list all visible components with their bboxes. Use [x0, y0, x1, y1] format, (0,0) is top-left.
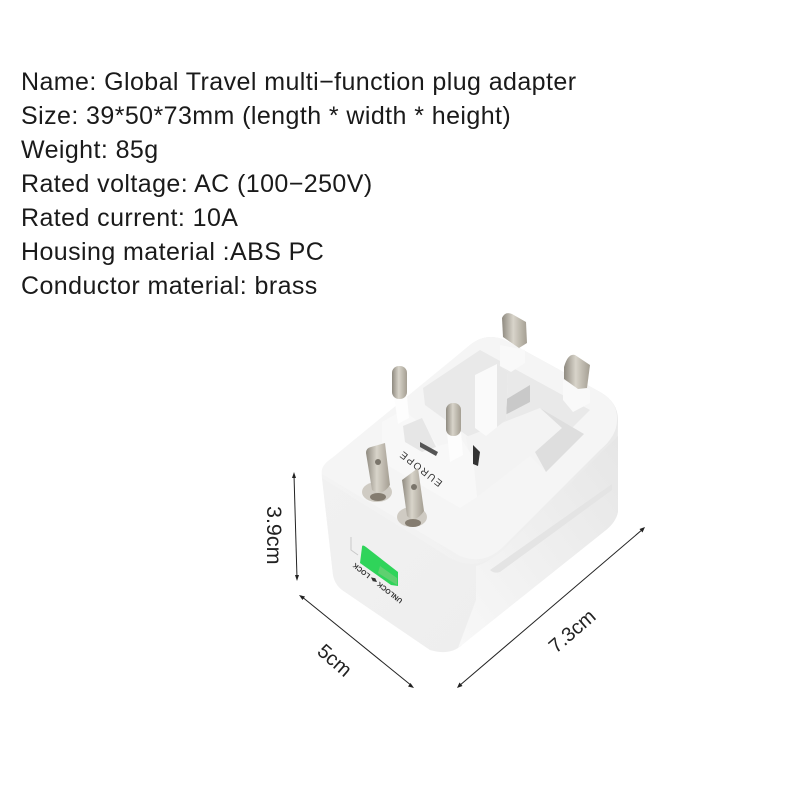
- UK pin rear right: [563, 355, 590, 412]
- spec: size: Size: 39*50*73mm (length * width * height): [21, 102, 511, 130]
- raised socket platform: [466, 408, 584, 497]
- UK pin rear left: [500, 313, 527, 372]
- dimension: length label: 7.3cm: [545, 605, 600, 658]
- spec: rated voltage: Rated voltage: AC (100−250V): [21, 170, 373, 198]
- dimension: width arrow: [299, 595, 414, 688]
- spec: weight: Weight: 85g: [21, 136, 159, 164]
- europe label: EUROPE: [397, 448, 445, 488]
- europe pin block: [382, 410, 477, 508]
- europe pin left: [392, 366, 409, 424]
- dimension: length arrow: [457, 527, 645, 688]
- UK socket recess: [423, 350, 590, 445]
- spec: housing material: Housing material :ABS PC: [21, 238, 324, 266]
- US pin right: [397, 468, 427, 527]
- dimension: height arrow: [292, 472, 299, 581]
- europe block recess: [403, 418, 436, 452]
- front face: [322, 478, 490, 652]
- spec: rated current: Rated current: 10A: [21, 204, 238, 232]
- green slider switch: [360, 546, 398, 586]
- spec: name: Name: Global Travel multi−function plug adapter: [21, 68, 576, 96]
- US pin left: [362, 443, 392, 502]
- specification text block: [21, 68, 576, 300]
- unlock lock label: UNLOCK ◂▸ LOCK: [352, 561, 404, 604]
- right side face: [458, 436, 618, 648]
- dimension: width label: 5cm: [313, 640, 356, 682]
- adapter body: [322, 337, 618, 652]
- recess window: [535, 408, 584, 472]
- UK earth pin: [475, 364, 508, 436]
- side highlight groove: [490, 484, 612, 573]
- top face: [322, 337, 617, 559]
- dimension: height label: 3.9cm: [262, 506, 286, 565]
- slider marker: [351, 537, 358, 555]
- europe pin right: [446, 403, 463, 462]
- UK slot dark wall: [505, 385, 530, 415]
- adapter illustration: [322, 313, 618, 652]
- spec: conductor material: Conductor material: brass: [21, 272, 318, 300]
